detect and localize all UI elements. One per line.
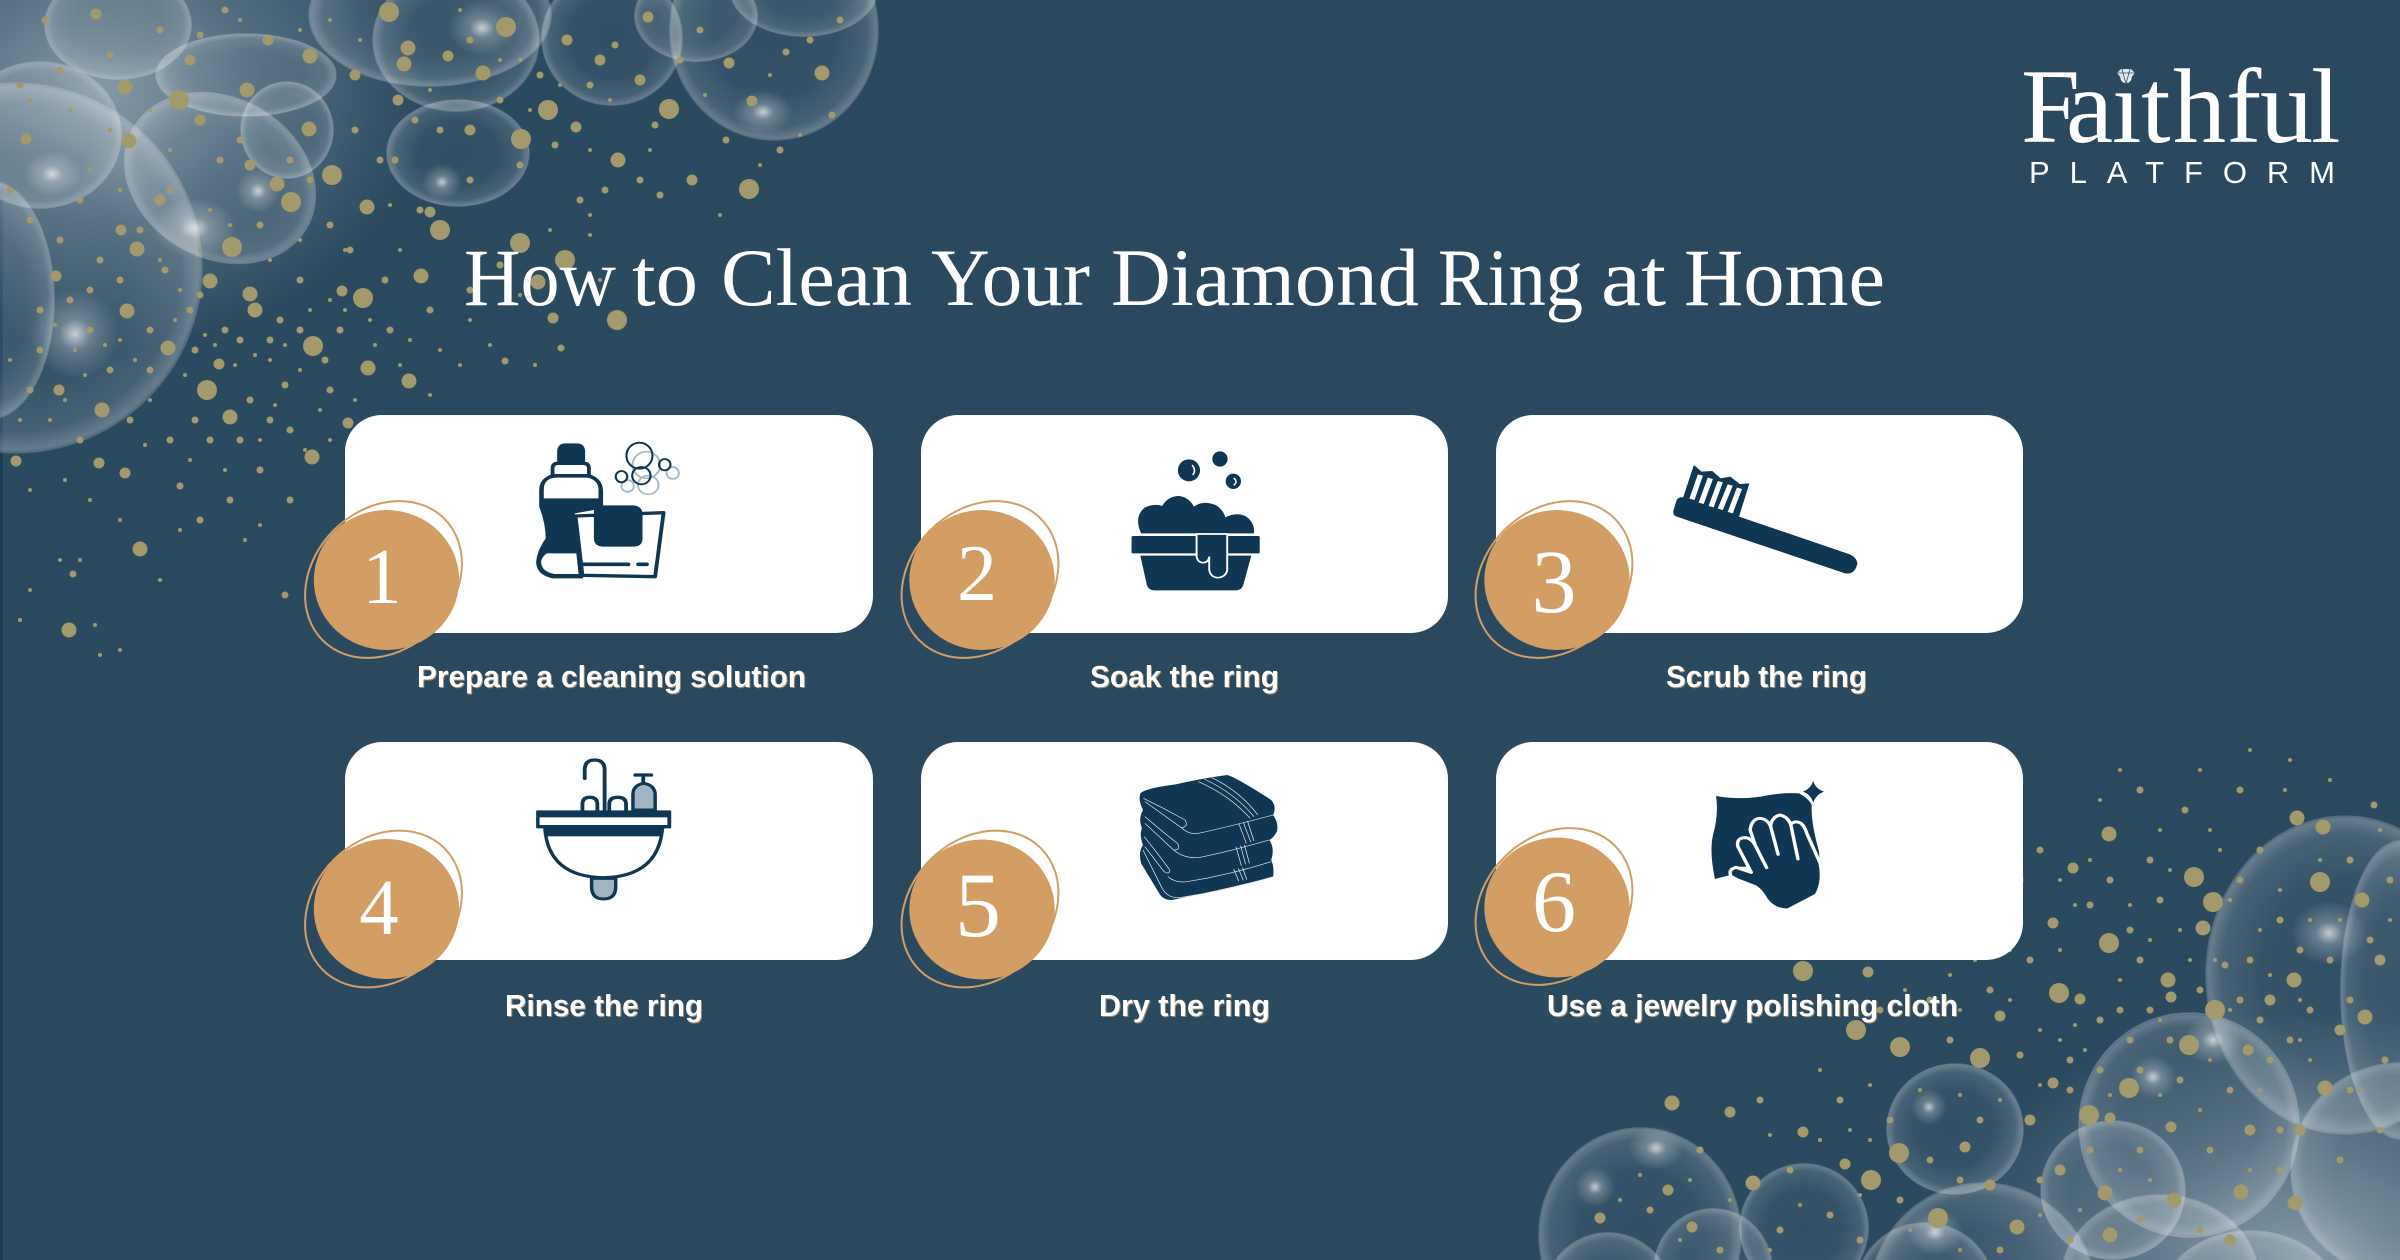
logo: PLATFORM — [2029, 155, 2335, 190]
card 3 — [1496, 415, 2023, 633]
card 6 — [1496, 742, 2023, 960]
number badge 6 — [1444, 796, 1664, 1017]
icon: polishing cloth and hand — [1711, 781, 1824, 910]
number badge 4 — [273, 799, 494, 1019]
bubbles: bottom right — [1538, 815, 2400, 1260]
icon: soapy basin — [1132, 451, 1260, 590]
step label 2: Soak the ring — [1090, 659, 1279, 694]
number badge 3: 3 — [1532, 533, 1576, 632]
step 1 — [273, 415, 873, 694]
number badge 3 — [1444, 469, 1664, 690]
step 5 — [870, 742, 1448, 1023]
step label 6: Use a jewelry polishing cloth — [1547, 988, 1958, 1023]
number badge 2 — [870, 469, 1090, 690]
number badge 5 — [870, 799, 1090, 1019]
number badge 5: 5 — [955, 854, 1001, 956]
step label 3: Scrub the ring — [1666, 659, 1867, 694]
step label 5: Dry the ring — [1099, 988, 1270, 1023]
title: How — [464, 232, 616, 323]
number badge 2: 2 — [957, 530, 997, 618]
card 4 — [345, 742, 873, 960]
step 4 — [273, 742, 873, 1023]
step label 4: Rinse the ring — [505, 988, 703, 1023]
icon: towels — [1140, 775, 1277, 900]
title: Ring — [1438, 232, 1583, 323]
icon: diamond — [2117, 69, 2135, 84]
title: to — [632, 232, 698, 323]
step 3 — [1444, 415, 2023, 694]
step 2 — [870, 415, 1448, 694]
step 6 — [1444, 742, 2023, 1023]
icon: sink — [536, 760, 671, 899]
gold flecks: bottom right — [1600, 750, 2390, 1250]
title: Diamond — [1111, 232, 1419, 323]
number badge 1 — [273, 469, 494, 690]
icon: toothbrush — [1673, 465, 1857, 574]
number badge 6: 6 — [1532, 854, 1576, 951]
title: Your — [931, 232, 1090, 323]
step label 1: Prepare a cleaning solution — [417, 659, 806, 694]
number badge 4: 4 — [359, 865, 399, 952]
title: Clean — [721, 232, 912, 323]
number badge 1: 1 — [362, 534, 402, 621]
card 5 — [921, 742, 1448, 960]
bubbles: top left — [0, 0, 879, 456]
logo: Faithful — [2021, 48, 2340, 165]
icon: bottle and basin — [536, 443, 679, 578]
gold flecks: top left — [10, 10, 840, 655]
title: at — [1601, 232, 1666, 323]
title: Home — [1684, 232, 1885, 323]
card 2 — [921, 415, 1448, 633]
card 1 — [345, 415, 873, 633]
